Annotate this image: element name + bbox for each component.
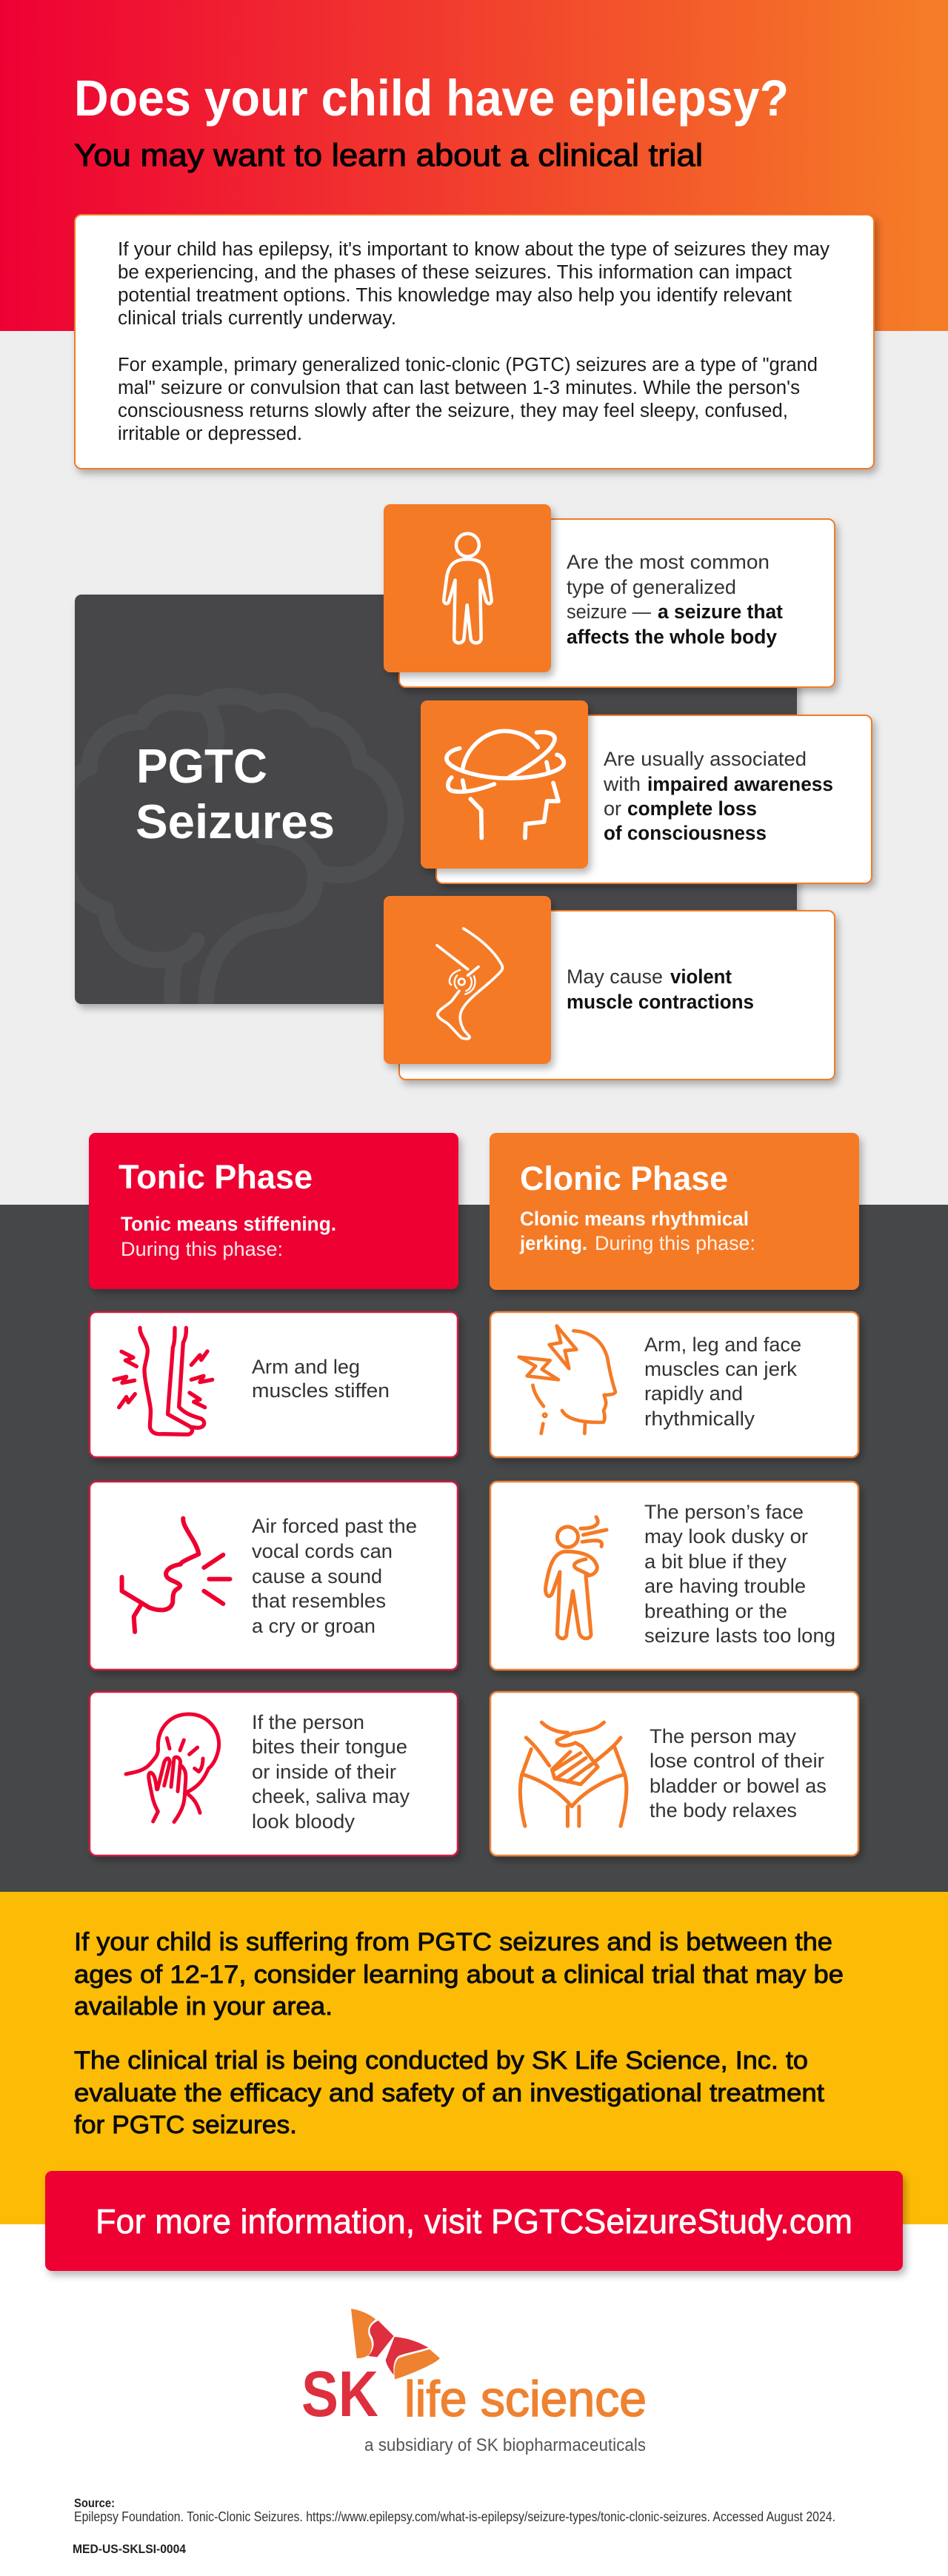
card text: complete loss [627,797,757,820]
card text: that resembles [252,1590,386,1612]
clonic definition [519,1208,755,1254]
card text: look bloody [252,1810,356,1833]
card text: muscles can jerk [644,1358,798,1380]
card text: May cause [567,966,663,988]
panel: clonic phase header [490,1133,859,1290]
card text [567,966,754,1013]
card text [603,748,833,844]
card text [252,1711,410,1833]
card text: vocal cords can [252,1540,393,1562]
PGTC Seizures heading: PGTC [136,739,267,793]
tonic definition: Tonic means stiffening. [121,1213,336,1235]
logo mark: butterfly [351,2309,440,2379]
card text: violent [670,966,732,988]
clonic heading: Clonic Phase [520,1160,728,1197]
text block: trial sponsor: The clinical trial is being conducted by SK Life Science, Inc. to [74,2047,808,2075]
card text [644,1501,835,1647]
card text: a seizure that [658,600,783,623]
card text: impaired awareness [647,773,833,795]
card text: bites their tongue [252,1736,407,1758]
subtitle: You may want to learn about a clinical trial [74,138,703,173]
card text: bladder or bowel as [650,1775,827,1797]
card text: cause a sound [252,1565,382,1588]
dark phases band [0,1205,948,1892]
card text: muscle contractions [567,991,754,1013]
card text: Arm, leg and face [644,1334,801,1356]
card: muscle contractions [384,896,835,1080]
logo wordmark: SK [301,2358,378,2430]
icon: brain watermark [67,696,395,1007]
clonic definition: jerking. [519,1232,587,1254]
clonic definition: Clonic means rhythmical [520,1208,749,1230]
card: clonic dusky face [490,1482,858,1670]
PGTC Seizures heading [136,739,335,849]
document code: MED-US-SKLSI-0004 [73,2542,186,2556]
card: impaired awareness [421,700,872,883]
icon: head with lightning bolts [519,1326,615,1433]
card text: The person may [650,1725,797,1747]
text block: trial sponsor: for PGTC seizures. [74,2111,297,2139]
PGTC Seizures heading: Seizures [136,794,335,849]
page background: light gray band [0,331,948,1205]
card text: Are the most common [567,551,770,573]
card text: breathing or the [644,1600,787,1622]
icon: stiff legs [114,1328,213,1434]
icon: hand over mouth [126,1714,219,1822]
logo wordmark [301,2358,647,2430]
source note: Source: [74,2496,115,2510]
card text [650,1725,827,1821]
intro paragraph one: potential treatment options. This knowledge may also help you identify relevant [118,285,792,306]
card text: may look dusky or [644,1525,808,1548]
text block: trial eligibility: If your child is suffering from PGTC seizures and is between the [74,1928,832,1956]
callout: visit website button [45,2171,903,2271]
card text: muscles stiffen [252,1379,390,1402]
card text [567,551,783,648]
card text: Are usually associated [604,748,807,770]
intro paragraph two: For example, primary generalized tonic-clonic (PGTC) seizures are a type of "grand [118,355,818,375]
card text: Air forced past the [252,1515,417,1537]
card text: seizure lasts too long [644,1625,835,1647]
intro paragraph one: clinical trials currently underway. [118,308,396,329]
panel: introduction [75,215,874,469]
card text: rapidly and [644,1382,743,1405]
logo tagline: a subsidiary of SK biopharmaceuticals [364,2435,646,2455]
card text: seizure — [567,600,651,623]
card text: the body relaxes [650,1799,797,1821]
source note: Epilepsy Foundation. Tonic-Clonic Seizures. https://www.epilepsy.com/what-is-epilepsy/seizure-types/tonic-clonic-seizures. Accessed August 2024. [74,2509,835,2524]
icon: person [444,534,492,643]
card: tonic tongue bite [90,1692,458,1856]
card text [644,1334,801,1430]
card text: a bit blue if they [644,1550,787,1573]
text block: trial sponsor [74,2047,825,2139]
tonic heading: Tonic Phase [118,1158,313,1196]
icon: face crying out [122,1519,230,1632]
card text: with [603,773,641,795]
icon: head with orbit [447,731,564,838]
card text: cheek, saliva may [252,1785,410,1807]
icon: person struggling to breathe [546,1517,607,1639]
header gradient band [0,0,948,331]
logo: SK life science [301,2309,647,2430]
card: whole body [384,504,835,687]
tonic definition [121,1213,336,1260]
card text: lose control of their [650,1750,824,1772]
card text: The person’s face [644,1501,804,1523]
card text: or inside of their [252,1761,396,1783]
card text [252,1356,390,1402]
title: Does your child have epilepsy? [74,70,789,127]
card text: affects the whole body [567,626,777,648]
card: clonic jerk [490,1312,858,1457]
intro paragraph two: irritable or depressed. [118,424,302,444]
icon: leg [437,929,502,1039]
intro paragraph two: mal" seizure or convulsion that can last between 1-3 minutes. While the person's [118,378,800,398]
card text [252,1515,417,1637]
yellow call to action band [0,1892,948,2224]
intro paragraph one: be experiencing, and the phases of these seizures. This information can impact [118,262,792,283]
intro paragraph one: If your child has epilepsy, it's important to know about the type of seizures they may [118,239,830,260]
card text: type of generalized [567,576,736,598]
intro paragraph two [118,355,818,444]
intro paragraph one [118,239,830,329]
card text: of consciousness [604,822,767,844]
card text: or [604,797,621,820]
tonic definition: During this phase: [121,1238,283,1260]
panel: tonic phase header [89,1133,458,1289]
card: clonic bladder control [490,1692,858,1856]
card text: rhythmically [644,1408,755,1430]
intro paragraph two: consciousness returns slowly after the seizure, they may feel sleepy, confused, [118,401,788,421]
card: tonic stiffen [90,1312,458,1457]
source note [74,2496,835,2524]
logo wordmark: life science [404,2371,647,2427]
text block: trial eligibility [74,1928,844,2021]
card text: If the person [252,1711,364,1733]
card text: Arm and leg [252,1356,360,1378]
card text: are having trouble [644,1575,806,1597]
callout: visit website button: For more information, visit PGTCSeizureStudy.com [96,2202,852,2241]
clonic definition: During this phase: [595,1232,755,1254]
text block: trial sponsor: evaluate the efficacy and safety of an investigational treatment [74,2079,825,2107]
icon: pelvis with hand [520,1722,627,1826]
text block: trial eligibility: ages of 12-17, consider learning about a clinical trial that may be [74,1961,844,1989]
card: tonic vocal cords [90,1482,458,1670]
panel: PGTC seizures [67,595,797,1007]
text block: trial eligibility: available in your area. [74,1993,333,2021]
card text: a cry or groan [252,1615,375,1637]
